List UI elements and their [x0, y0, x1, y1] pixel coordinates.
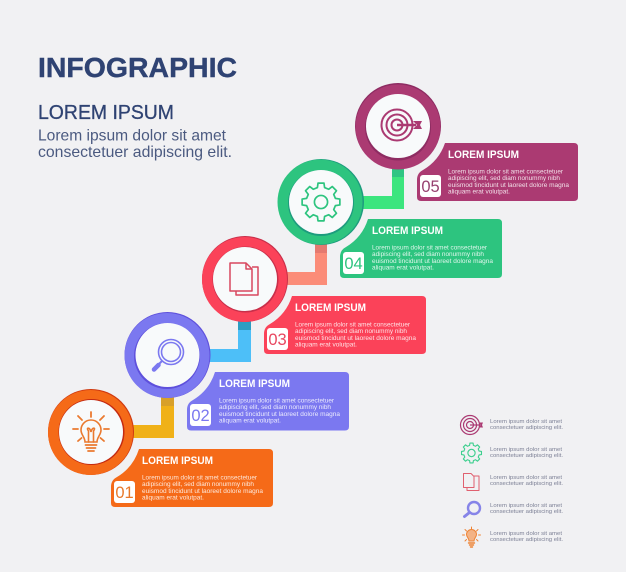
legend text 5: consectetuer adipiscing elit.: [490, 537, 563, 543]
icon: gear: [302, 183, 340, 221]
connector 02: [130, 397, 174, 438]
body 03: [295, 322, 417, 348]
circle 03: [202, 236, 288, 322]
circle 05: [355, 83, 441, 170]
heading 01: LOREM IPSUM: [142, 455, 213, 467]
body 01: euismod tincidunt ut laoreet dolore magna: [142, 488, 264, 495]
heading 04: LOREM IPSUM: [372, 225, 443, 237]
legend text 3: [490, 475, 563, 487]
intro text: Lorem ipsum dolor sit amet: [38, 128, 227, 144]
card 02: [187, 372, 349, 430]
body 04: [372, 244, 494, 272]
connector 05: [360, 168, 404, 209]
legend text 1: Lorem ipsum dolor sit amet: [490, 419, 562, 425]
legend text 3: consectetuer adipiscing elit.: [490, 481, 563, 487]
body 02: aliquam erat volutpat.: [219, 418, 281, 424]
number 05: 05: [421, 178, 440, 196]
card 03: [264, 296, 426, 354]
legend text 4: [490, 503, 563, 515]
step 03: documents: [202, 236, 426, 362]
legend text 2: Lorem ipsum dolor sit amet: [490, 447, 562, 453]
legend text 4: consectetuer adipiscing elit.: [490, 509, 563, 515]
body 05: aliquam erat volutpat.: [448, 188, 510, 196]
body 02: Lorem ipsum dolor sit amet consectetuer: [219, 398, 334, 404]
body 02: euismod tincidunt ut laoreet dolore magna: [219, 411, 341, 418]
body 04: adipiscing elit, sed diam nonummy nibh: [372, 251, 485, 258]
legend text 4: Lorem ipsum dolor sit amet: [490, 503, 562, 509]
body 01: Lorem ipsum dolor sit amet consectetuer: [142, 474, 257, 482]
body 05: adipiscing elit, sed diam nonummy nibh: [448, 175, 561, 182]
legend text 3: Lorem ipsum dolor sit amet: [490, 475, 562, 481]
body 04: Lorem ipsum dolor sit amet consectetuer: [372, 244, 487, 252]
subtitle: LOREM IPSUM: [38, 102, 174, 124]
legend icon: light bulb: [462, 527, 480, 547]
card 05: [417, 143, 578, 201]
circle 02: [124, 312, 210, 398]
number 03: 03: [268, 331, 287, 349]
heading 03: LOREM IPSUM: [295, 302, 366, 314]
body 05: Lorem ipsum dolor sit amet consectetuer: [448, 168, 563, 176]
number 04: 04: [344, 255, 363, 273]
legend icon: magnifier: [464, 502, 480, 516]
legend text 2: [490, 447, 563, 459]
heading 02: LOREM IPSUM: [219, 378, 290, 390]
body 02: adipiscing elit, sed diam nonummy nibh: [219, 404, 332, 411]
intro text: consectetuer adipiscing elit.: [38, 144, 232, 161]
step 04: gear: [278, 159, 502, 285]
body 03: adipiscing elit, sed diam nonummy nibh: [295, 328, 408, 335]
circle 04: [278, 159, 364, 245]
connector 04: [283, 244, 327, 285]
legend text 2: consectetuer adipiscing elit.: [490, 453, 563, 459]
card 01: [111, 449, 273, 507]
body 01: aliquam erat volutpat.: [142, 494, 204, 502]
icon: target: [382, 110, 422, 140]
body 01: adipiscing elit, sed diam nonummy nibh: [142, 481, 255, 488]
body 02: [219, 398, 341, 424]
icon: magnifier: [154, 340, 184, 370]
legend text 1: [490, 419, 563, 431]
body 04: euismod tincidunt ut laoreet dolore magna: [372, 258, 494, 265]
body 03: Lorem ipsum dolor sit amet consectetuer: [295, 322, 410, 328]
body 03: euismod tincidunt ut laoreet dolore magna: [295, 335, 417, 342]
heading 05: LOREM IPSUM: [448, 149, 519, 161]
body 05: euismod tincidunt ut laoreet dolore magna: [448, 182, 570, 189]
step 02: magnifier: [124, 312, 349, 438]
legend: [460, 416, 563, 547]
card 04: [340, 219, 502, 278]
body 04: aliquam erat volutpat.: [372, 264, 434, 272]
icon: light bulb: [73, 412, 109, 451]
legend icon: documents: [464, 474, 479, 490]
legend text 5: Lorem ipsum dolor sit amet: [490, 531, 562, 537]
title: INFOGRAPHIC: [38, 52, 237, 83]
step 05: target: [355, 83, 578, 209]
legend icon: target: [460, 416, 483, 434]
connector 03: [206, 321, 251, 362]
step 01: light bulb: [48, 389, 273, 507]
legend text 5: [490, 531, 563, 543]
legend icon: gear: [462, 443, 481, 463]
intro text: [38, 128, 232, 161]
body 01: [142, 474, 264, 502]
legend text 1: consectetuer adipiscing elit.: [490, 425, 563, 431]
number 02: 02: [191, 407, 210, 425]
body 05: [448, 168, 570, 196]
number 01: 01: [115, 484, 134, 502]
circle 01: [48, 389, 134, 475]
icon: documents: [230, 263, 258, 295]
body 03: aliquam erat volutpat.: [295, 342, 357, 348]
